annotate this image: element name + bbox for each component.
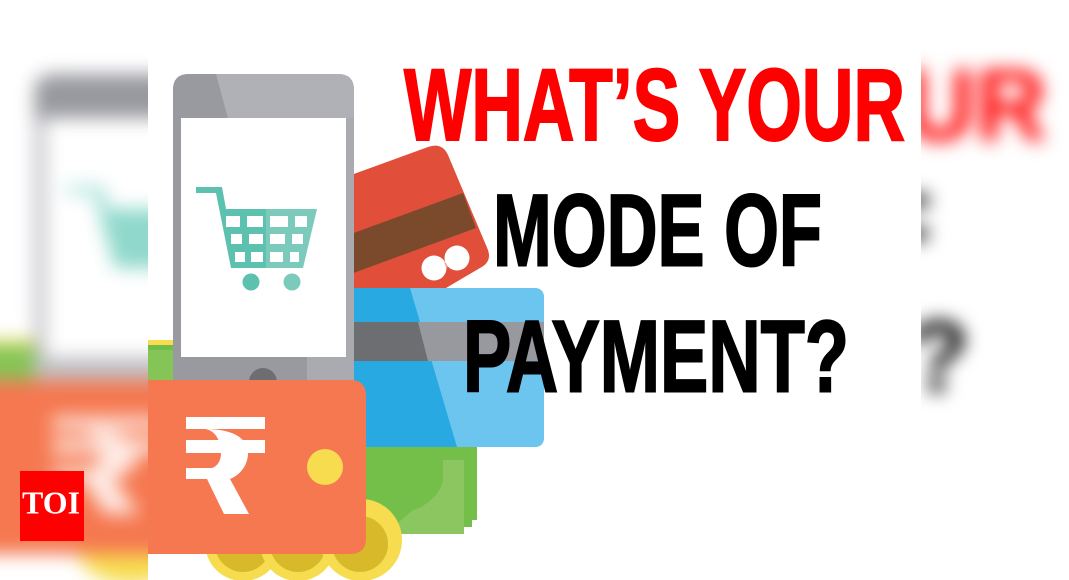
icon: blue credit card: [340, 288, 544, 447]
title: payment?: PAYMENT?: [463, 300, 849, 414]
icon: orange wallet with rupee: [148, 380, 366, 554]
icon: red credit card: [340, 146, 489, 288]
title: mode of: MODE OF: [493, 174, 822, 288]
TOI logo badge: [20, 471, 84, 541]
icon: smartphone: [173, 74, 354, 400]
rupee symbol: [186, 417, 265, 514]
icon: cash stack behind phone: [148, 340, 173, 380]
icon: shopping cart: [196, 187, 317, 290]
TOI logo badge: TOI: [22, 484, 80, 520]
icon: green banknotes: [366, 447, 477, 534]
central white panel: [148, 0, 921, 580]
icon: gold coins: [205, 499, 402, 580]
